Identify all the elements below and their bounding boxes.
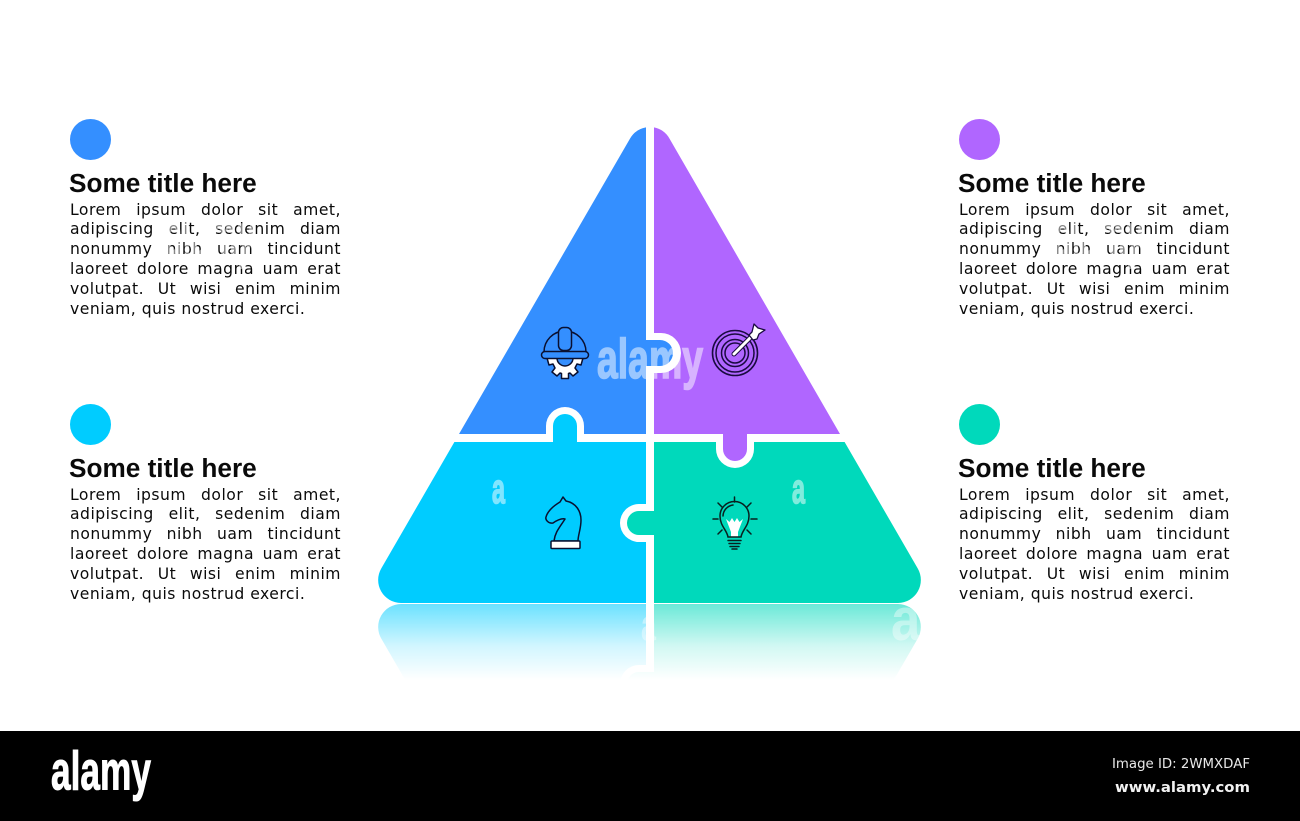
panel: top left: volutpat. Ut wisi enim minim: [70, 280, 341, 298]
panel: top right: Some title here: [958, 168, 1146, 198]
panel: bottom right: volutpat. Ut wisi enim minim: [959, 565, 1230, 583]
panel: top right: volutpat. Ut wisi enim minim: [959, 280, 1230, 298]
panel: top left: Some title here: [69, 168, 257, 198]
watermark in reflection: al: [891, 586, 935, 653]
panel: bottom left: laoreet dolore magna uam erat: [70, 545, 341, 563]
panel: top right: nonummy nibh uam tincidunt: [959, 240, 1230, 258]
panel: top left: veniam, quis nostrud exerci.: [70, 300, 305, 318]
panel: bottom right: Lorem ipsum dolor sit amet,: [959, 486, 1230, 504]
puzzle piece: cyan: [378, 414, 646, 603]
watermark over text: alamy: [1054, 201, 1144, 270]
icon: helmet with gear: [542, 328, 588, 378]
footer url: www.alamy.com: [1115, 780, 1250, 796]
panel: bottom right: Some title here: [958, 453, 1146, 483]
panel: top left: laoreet dolore magna uam erat: [70, 260, 341, 278]
panel: bottom right: laoreet dolore magna uam erat: [959, 545, 1230, 563]
footer bar: [0, 731, 1300, 821]
panel: bottom left: veniam, quis nostrud exerci.: [70, 585, 305, 603]
panel: top right: Lorem ipsum dolor sit amet,: [959, 201, 1230, 219]
panel: top right: [958, 119, 1230, 318]
watermark on pyramid: [492, 327, 805, 512]
panel: bottom right: nonummy nibh uam tincidunt: [959, 525, 1230, 543]
icon: light bulb: [713, 497, 757, 549]
footer logo: alamy: [51, 740, 151, 802]
watermark on pyramid: a: [492, 465, 505, 512]
panel: bottom right: [958, 404, 1230, 603]
panel: bottom right: veniam, quis nostrud exerci.: [959, 585, 1194, 603]
watermark on pyramid: a: [792, 465, 805, 512]
icon: target with arrow: [712, 324, 765, 376]
panel: bottom left: volutpat. Ut wisi enim minim: [70, 565, 341, 583]
icon: chess knight: [546, 497, 581, 548]
panel: top right: adipiscing elit, sedenim diam: [959, 220, 1230, 238]
puzzle piece: teal: [627, 442, 921, 603]
panel: top right: veniam, quis nostrud exerci.: [959, 300, 1194, 318]
watermark over text: alamy: [165, 201, 255, 270]
panel: bottom left: Some title here: [69, 453, 257, 483]
reflection below pyramid: [378, 604, 921, 793]
panel: bottom left: nonummy nibh uam tincidunt: [70, 525, 341, 543]
watermark on pyramid: alamy: [597, 327, 703, 390]
panel: bottom left: [69, 404, 341, 603]
panel: top left: [69, 119, 341, 318]
panel: bottom left: Lorem ipsum dolor sit amet,: [70, 486, 341, 504]
panel: bottom right: adipiscing elit, sedenim diam: [959, 505, 1230, 523]
puzzle piece: purple: [654, 127, 840, 461]
watermark in reflection: a: [641, 601, 656, 650]
puzzle piece: blue: [459, 127, 673, 434]
footer image id: Image ID: 2WMXDAF: [1112, 756, 1250, 772]
panel: top left: adipiscing elit, sedenim diam: [70, 220, 341, 238]
panel: top left: nonummy nibh uam tincidunt: [70, 240, 341, 258]
panel: bottom left: adipiscing elit, sedenim diam: [70, 505, 341, 523]
watermark in reflection: [641, 586, 935, 653]
panel: top left: Lorem ipsum dolor sit amet,: [70, 201, 341, 219]
panel: top right: laoreet dolore magna uam erat: [959, 260, 1230, 278]
